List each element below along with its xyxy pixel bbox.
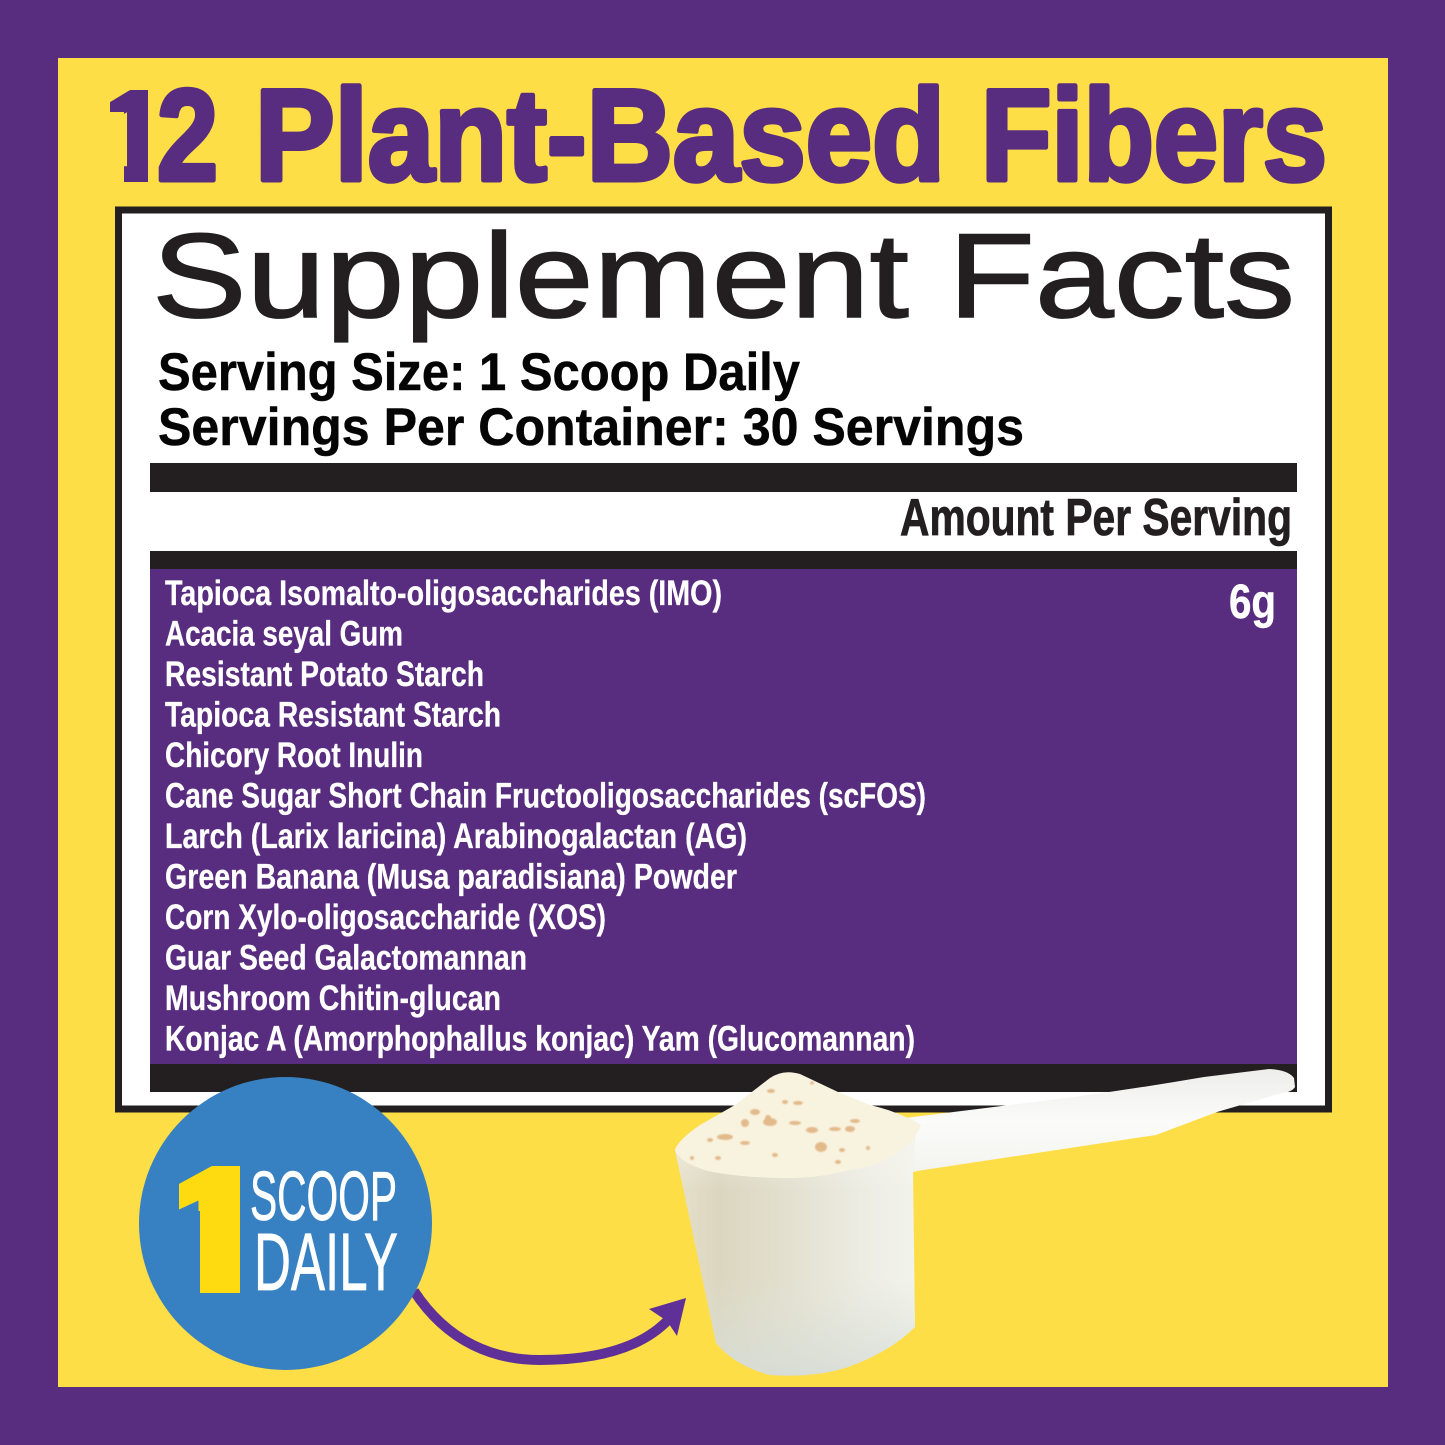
scoop handle (905, 1069, 1295, 1175)
header divider bar (150, 551, 1297, 569)
ingredient list: Konjac A (Amorphophallus konjac) Yam (Glucomannan) (165, 1020, 915, 1058)
arrow: badge to scoop (414, 1291, 686, 1360)
panel: supplement facts label (118, 209, 1328, 1109)
title (110, 83, 1324, 184)
text block: serving information (158, 343, 1024, 457)
ingredient list: Guar Seed Galactomannan (165, 938, 527, 978)
column header: amount per serving: Amount Per Serving (900, 489, 1292, 547)
ingredient list (165, 574, 926, 1058)
ingredient list: Chicory Root Inulin (165, 736, 423, 775)
icon: measuring scoop with powder (675, 1069, 1295, 1376)
panel: purple ingredient block (150, 569, 1297, 1064)
ingredient list: Tapioca Resistant Starch (165, 696, 501, 734)
thick divider bar (150, 463, 1297, 492)
ingredient list: Larch (Larix laricina) Arabinogalactan (AG) (165, 817, 747, 856)
text block: serving information: Serving Size: 1 Scoop Daily (158, 343, 800, 402)
amount value: 6g: 6g (1229, 576, 1276, 629)
scoop cup (675, 1128, 916, 1376)
title: Fibers (981, 62, 1327, 208)
ingredient list: Resistant Potato Starch (165, 655, 484, 694)
title: 1 (97, 64, 175, 210)
ingredient list: Mushroom Chitin-glucan (165, 979, 501, 1018)
bottom divider bar (150, 1064, 1297, 1092)
title: 2 (157, 62, 218, 208)
badge text: SCOOP: SCOOP (250, 1157, 397, 1235)
badge text: DAILY: DAILY (254, 1217, 398, 1308)
badge: 1 scoop daily (139, 1077, 432, 1370)
ingredient list: Cane Sugar Short Chain Fructooligosaccharides (scFOS) (165, 776, 926, 816)
powder speckles (690, 1082, 870, 1164)
powder mound (675, 1072, 921, 1178)
ingredient list: Corn Xylo-oligosaccharide (XOS) (165, 898, 606, 937)
ingredient list: Green Banana (Musa paradisiana) Powder (165, 858, 737, 896)
title: Plant-Based (255, 62, 945, 208)
text block: serving information: Servings Per Container: 30 Servings (158, 398, 1024, 457)
numeral 1: 1 (150, 1126, 288, 1332)
ingredient list: Acacia seyal Gum (165, 614, 403, 654)
heading: Supplement Facts: Supplement Facts (152, 209, 1295, 343)
ingredient list: Tapioca Isomalto-oligosaccharides (IMO) (165, 574, 722, 613)
